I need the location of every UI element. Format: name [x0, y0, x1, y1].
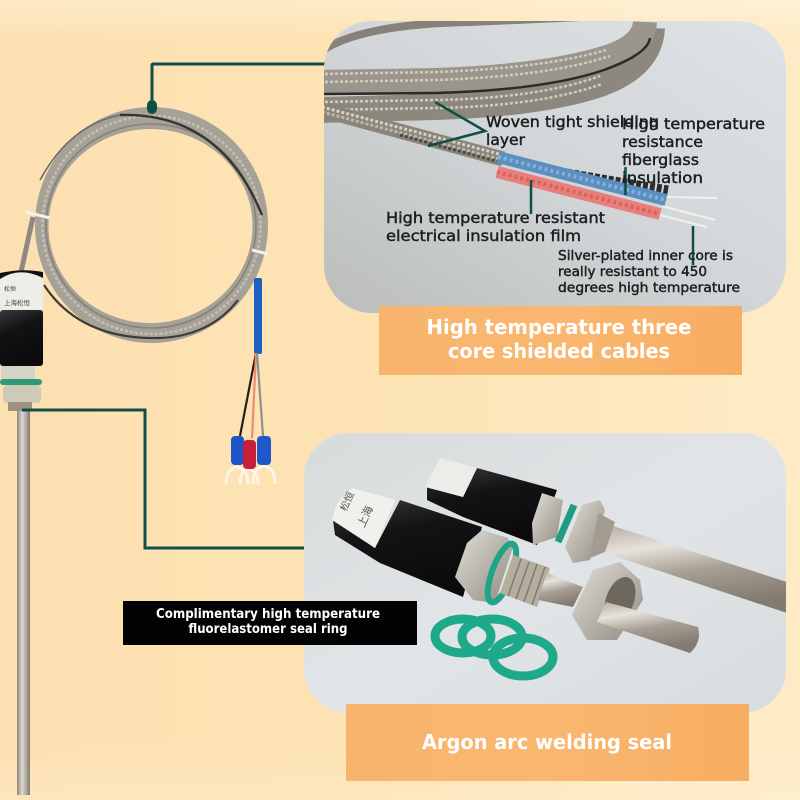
front sensor: 上海	[354, 503, 376, 529]
product: coiled thermocouple cable with probe	[0, 107, 275, 795]
coiled braided cable	[35, 107, 268, 343]
fork terminals	[226, 436, 275, 485]
callout: silver-plated core: Silver-plated inner core is	[558, 249, 733, 264]
callout: silver-plated core	[558, 249, 740, 296]
sensor head: 上海松恒	[4, 298, 30, 307]
heading: argon arc welding: Argon arc welding seal	[422, 730, 672, 754]
stainless probe rod	[17, 400, 30, 795]
callout: fiberglass insulation: fiberglass	[622, 151, 699, 169]
callout: insulation film: High temperature resistant	[386, 209, 605, 227]
callout: insulation film: electrical insulation film	[386, 227, 581, 245]
front sensor	[332, 488, 699, 653]
callout: silver-plated core: degrees high temperature	[558, 281, 740, 296]
front sensor: 松恒	[337, 490, 357, 513]
lead wires	[240, 353, 263, 438]
heading: high temperature cables	[379, 306, 742, 375]
callout: woven shielding: layer	[486, 131, 526, 149]
caption: seal ring	[123, 601, 417, 645]
connector line to seal photo	[22, 410, 310, 548]
heading: high temperature cables: High temperature three	[426, 315, 692, 339]
cable tail to sensor	[21, 217, 33, 272]
callout: silver-plated core: really resistant to 450	[558, 265, 707, 280]
silver inner cores	[660, 197, 717, 227]
callout lines	[428, 102, 693, 265]
callout: woven shielding: Woven tight shielding	[486, 113, 659, 131]
rear sensor	[425, 458, 790, 614]
callout: fiberglass insulation: High temperature	[622, 115, 765, 133]
connector line to cable photo	[147, 64, 326, 114]
heading: high temperature cables: core shielded cables	[448, 339, 670, 363]
callout: fiberglass insulation: resistance	[622, 133, 703, 151]
blue sleeve	[254, 278, 262, 354]
black insulated core	[560, 172, 668, 190]
callout: woven shielding	[486, 113, 659, 149]
blue insulated core	[498, 157, 666, 200]
sensor head: 松恒	[4, 285, 16, 293]
callout: fiberglass insulation: insulation	[622, 169, 703, 187]
caption: seal ring: Complimentary high temperature	[156, 607, 380, 622]
heading: argon arc welding	[346, 704, 749, 781]
front cable	[322, 107, 503, 163]
sensor head	[0, 270, 43, 411]
O-rings	[435, 619, 553, 676]
red insulated core	[497, 172, 660, 214]
panel: cable photo	[320, 14, 786, 313]
callout: fiberglass insulation	[622, 115, 765, 187]
callout: insulation film	[386, 209, 605, 245]
panel: seal photo	[304, 433, 790, 713]
caption: seal ring: fluorelastomer seal ring	[188, 622, 348, 637]
cable ties	[26, 212, 268, 254]
back cable loop	[320, 14, 652, 110]
